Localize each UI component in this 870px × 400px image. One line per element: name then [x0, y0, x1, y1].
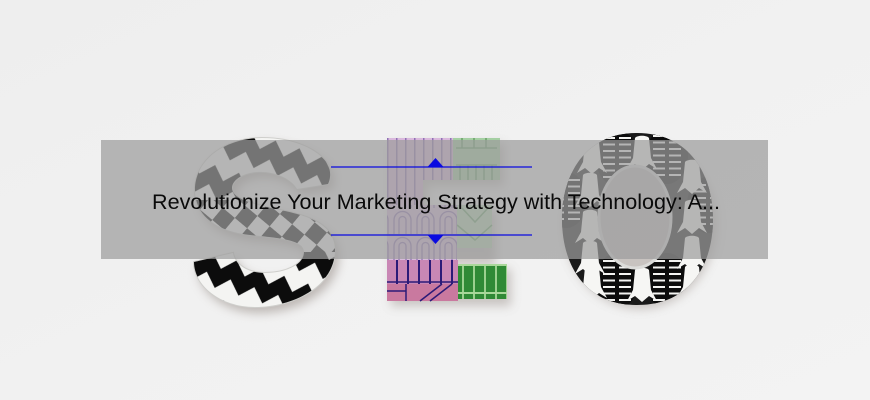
title: Revolutionize Your Marketing Strategy with Technology: A...	[152, 191, 720, 214]
bottom blue rule with down arrow	[331, 235, 532, 244]
translucent title band	[101, 140, 768, 259]
letter O	[562, 133, 715, 314]
top blue rule with up arrow	[331, 158, 532, 167]
letter S	[194, 138, 339, 313]
letter E	[387, 138, 511, 306]
infographic canvas	[101, 133, 768, 318]
